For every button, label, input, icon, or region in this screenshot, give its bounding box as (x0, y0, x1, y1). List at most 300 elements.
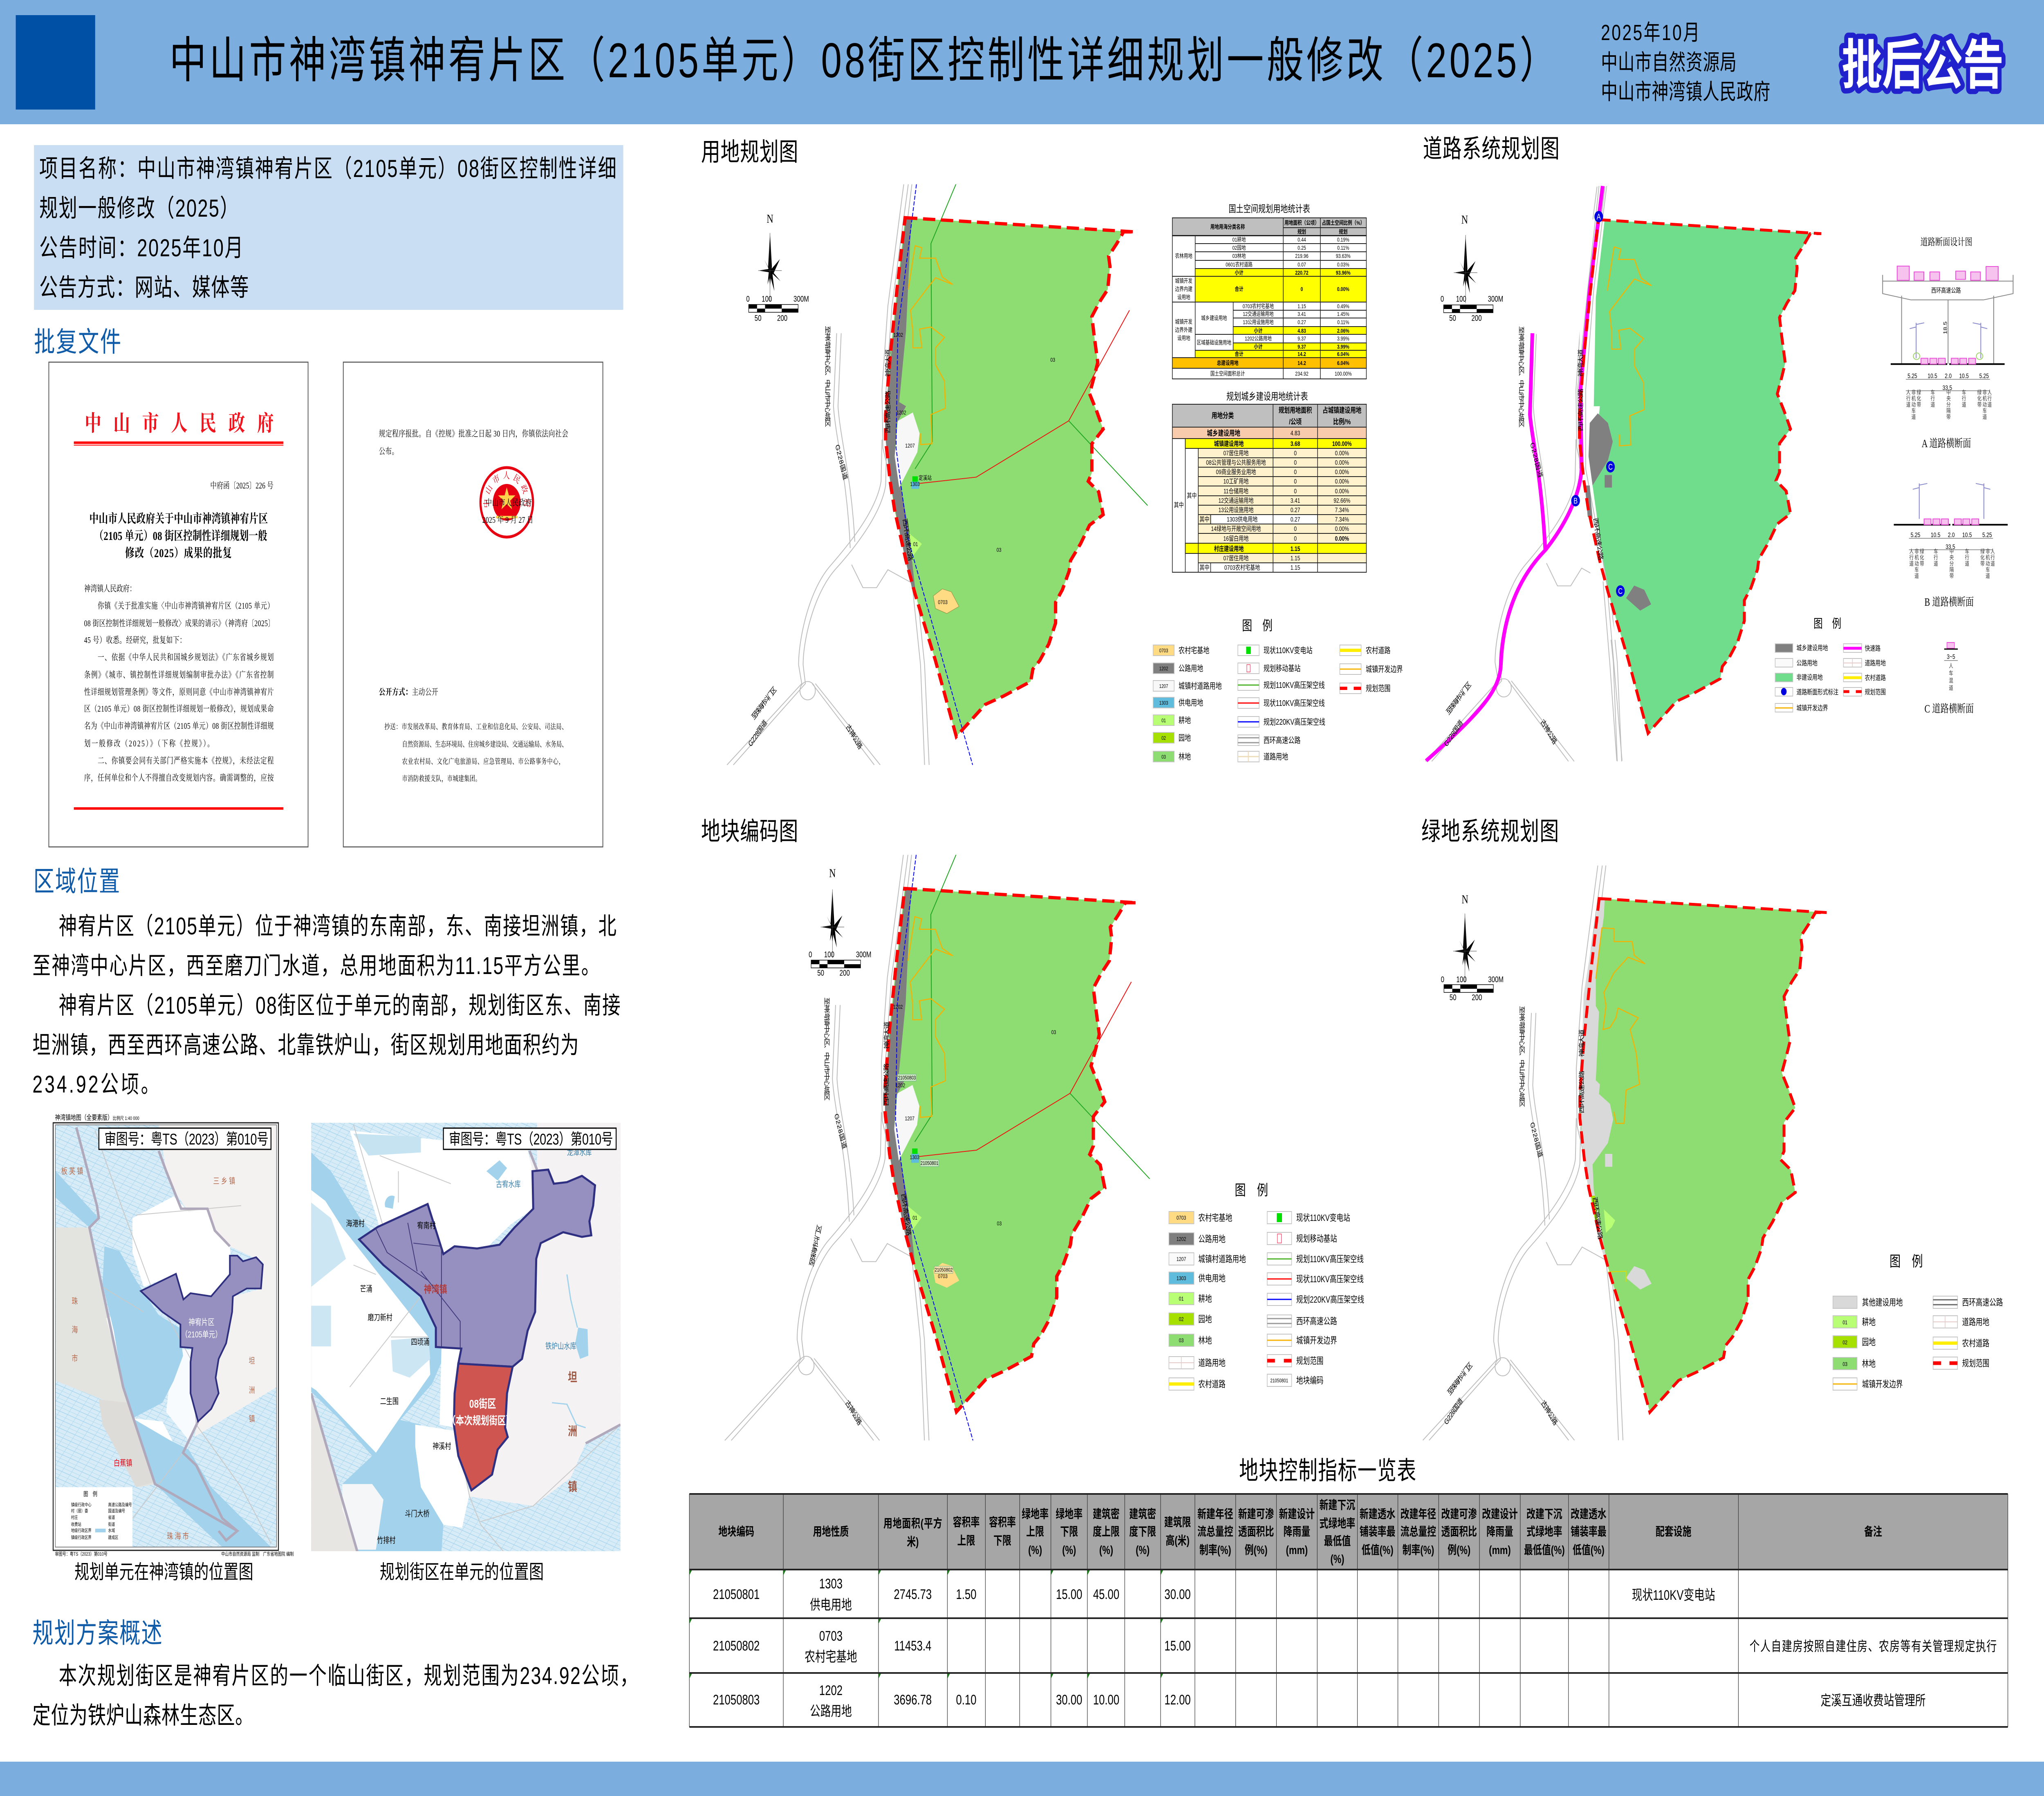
red government letterhead: 中山市人民政府 (85, 412, 274, 436)
caption: unit location: 规划单元在神湾镇的位置图 (74, 1561, 253, 1583)
section markers: C (1618, 587, 1623, 596)
urban-rural construction land table: 11仓储用地 (1224, 488, 1248, 495)
place names: 古宥水库 (496, 1180, 521, 1189)
legend: land use plan: 耕地 (1179, 716, 1191, 725)
land use statistics table (1172, 204, 1366, 379)
map legend: 高速公路及编号 (108, 1502, 132, 1507)
table row 21050803: 0.10 (956, 1693, 977, 1708)
map: block location within unit: 坦 (568, 1371, 577, 1384)
table row 21050801: 30.00 (1164, 1587, 1191, 1602)
approval body text: 条例》《城市、镇控制性详细规划编制审批办法》《广东省控制 (84, 670, 274, 680)
urban-rural construction land table: 7.34% (1335, 506, 1349, 514)
table header cells: 低值(%) (1573, 1543, 1605, 1557)
plot codes: 01 (912, 1215, 917, 1221)
urban-rural construction land table: 07居住用地 (1224, 450, 1248, 457)
section C (1925, 643, 1974, 715)
compass and scale: 200 (840, 968, 850, 978)
urban-rural construction land table: 其中 (1174, 502, 1184, 509)
legend: green space: 西环高速公路 (1962, 1298, 2003, 1308)
land use statistics table: 0.00% (1337, 286, 1349, 292)
table header cells: 新建年径 (1197, 1507, 1233, 1521)
legend: land use plan: 城镇开发边界 (1366, 665, 1403, 674)
land use statistics table: 0.07 (1298, 262, 1306, 268)
land use statistics table: 边界内建 (1175, 286, 1192, 292)
section B: 人行道 (1909, 549, 1914, 567)
land use statistics table: 3.99% (1337, 336, 1349, 342)
section A: 非机动车道 (1912, 390, 1916, 420)
table header cells: 改建可渗 (1441, 1507, 1477, 1521)
approval body text (84, 584, 274, 783)
land use statistics table: 规划 (1339, 228, 1347, 235)
table row 21050801: 1303 (819, 1577, 843, 1592)
land use statistics table: 6.04% (1337, 360, 1349, 366)
compass and scale: 200 (1472, 993, 1482, 1002)
legend: plot codes: 1202 (1177, 1236, 1186, 1242)
compass and scale: 300M (856, 950, 872, 959)
table row 21050802: 11453.4 (894, 1639, 931, 1654)
legend: plot codes: 林地 (1198, 1336, 1212, 1346)
urban-rural construction land table: 4.83 (1291, 430, 1300, 437)
logo block (16, 15, 95, 110)
land use statistics table: 01耕地 (1233, 236, 1246, 243)
urban-rural construction land table: 0 (1294, 478, 1297, 486)
urban-rural construction land table: 1303供电用地 (1227, 516, 1257, 524)
compass and scale: 0 (809, 950, 812, 959)
section B: 车行道 (1965, 548, 1969, 567)
legend: plot codes: 城镇开发边界 (1296, 1336, 1337, 1346)
section A: 绿化带 (1977, 389, 1982, 408)
place names: 海港村 (346, 1219, 365, 1228)
land use plan map: 1303 (910, 481, 920, 487)
place names: 二生围 (380, 1397, 399, 1406)
plot code plan map: 21050801 (921, 1161, 938, 1166)
map labels: G228国道 (833, 1113, 848, 1150)
plot codes (893, 1004, 1056, 1279)
map labels: 至珠海市斗门区 (1445, 680, 1472, 717)
urban-rural construction land table (1172, 391, 1366, 572)
legend: plot codes: 农村道路 (1198, 1379, 1226, 1390)
map: unit location within town: 审图号：粤TS（2023）第010号 (55, 1551, 108, 1557)
regional location paragraph: 坦洲镇，西至西环高速公路、北靠铁炉山，街区规划用地面积约为 (32, 1032, 579, 1059)
legend: land use plan: 园地 (1179, 733, 1191, 743)
map legend: 镇级行政区界 (71, 1534, 92, 1540)
legend: land use plan: 规划移动基站 (1264, 664, 1300, 673)
project info panel: 公告方式：网站、媒体等 (39, 274, 249, 302)
legend: land use plan: 01 (1161, 718, 1166, 723)
land use statistics table: 3.99% (1337, 344, 1349, 350)
land use plan map: 1202 (894, 332, 903, 338)
land use statistics table: 1202公路用地 (1245, 335, 1272, 342)
urban-rural construction land table: 0.00% (1335, 468, 1349, 476)
map heading: green space: 绿地系统规划图 (1421, 817, 1559, 846)
land use statistics table: 0.19% (1337, 237, 1349, 243)
urban-rural construction land table: 0.00% (1335, 478, 1349, 486)
legend: road system: 城乡建设用地 (1797, 644, 1828, 652)
legend: land use plan: 农村道路 (1366, 646, 1391, 655)
section B: 非机动车道 (1986, 549, 1990, 579)
map labels: 至珠海市斗门区 (808, 1224, 823, 1268)
section A: A 道路横断面 (1922, 437, 1971, 450)
approval document page 2: 公布。 (379, 447, 398, 457)
land use statistics table: 区域基础设施用地 (1197, 339, 1231, 346)
map labels: G228国道 (1443, 718, 1464, 748)
table row 21050802: 21050802 (713, 1639, 760, 1654)
urban-rural construction land table: 0.00% (1335, 525, 1349, 533)
land use statistics table: 0.27 (1298, 319, 1306, 325)
legend: land use plan: 图 例 (1242, 618, 1273, 634)
place names: 磨刀新村 (368, 1313, 392, 1322)
header band (0, 0, 2044, 124)
legend: plot codes: 西环高速公路 (1296, 1317, 1337, 1327)
land use statistics table: 0703农村宅基地 (1243, 302, 1274, 309)
section B: 人行道 (1990, 549, 1995, 567)
legend: road system: 城镇开发边界 (1797, 704, 1828, 712)
place names: 神溪村 (433, 1442, 451, 1451)
place names: 铁炉山水库 (545, 1341, 576, 1351)
regional location paragraph (32, 913, 621, 1098)
section A: 绿化带 (1917, 389, 1921, 408)
map legend (71, 1490, 132, 1540)
map legend: 省道 (108, 1514, 115, 1520)
legend: plot codes: 农村宅基地 (1198, 1213, 1232, 1223)
approved notice badge: 批后公告 (1842, 35, 2004, 95)
map labels: G228国道 (1529, 441, 1544, 479)
regional location paragraph: 神宥片区（2105单元）08街区位于单元的南部，规划街区东、南接 (59, 992, 621, 1019)
table header cells: 备注 (1864, 1525, 1882, 1538)
land use statistics table: 9.37 (1298, 336, 1306, 342)
approval body text: 序，任何单位和个人不得擅自改变规划内容。确需调整的，应按 (84, 773, 274, 783)
road system plan map (1425, 186, 1821, 761)
urban-rural construction land table: 7.34% (1335, 516, 1349, 524)
place names: 斗门大桥 (405, 1509, 430, 1518)
legend: plot codes: 园地 (1198, 1315, 1212, 1325)
legend: road system: 图 例 (1813, 617, 1841, 631)
land use statistics table: 12交通运输用地 (1243, 310, 1273, 317)
urban-rural construction land table: 占城镇建设用地 (1322, 406, 1361, 415)
compass and scale (1441, 213, 1503, 323)
table header cells: 铺装率最 (1360, 1525, 1396, 1538)
urban-rural construction land table: 08公共管理与公共服务用地 (1206, 459, 1266, 467)
legend: plot codes: 道路用地 (1198, 1358, 1226, 1368)
project info panel (34, 145, 623, 310)
table row 21050803: 21050803 (713, 1693, 760, 1708)
table header cells: 新建透水 (1360, 1507, 1396, 1521)
section B: 车行道 (1934, 548, 1938, 567)
table header cells: 例(%) (1245, 1543, 1268, 1557)
compass and scale: 0 (1441, 975, 1444, 984)
land use statistics table: 4.83 (1298, 328, 1306, 334)
section A: 5.25 (1979, 372, 1989, 380)
urban-rural construction land table: 比例/% (1333, 418, 1351, 426)
section markers: C (1608, 462, 1613, 472)
table header cells: 改建下沉 (1526, 1507, 1562, 1521)
land use statistics table: 农林用地 (1175, 253, 1192, 259)
land use statistics table: 城乡建设用地 (1201, 314, 1227, 321)
section B: 33.5 (1945, 543, 1955, 551)
compass and scale: 300M (793, 294, 809, 304)
table row 21050801: 21050801 (713, 1587, 760, 1602)
section B: B 道路横断面 (1925, 596, 1974, 609)
unit label: 神宥片区 (188, 1317, 215, 1327)
table row 21050801: 15.00 (1056, 1587, 1082, 1602)
highway corridor (1580, 219, 1616, 640)
table row 21050802: 15.00 (1164, 1639, 1191, 1654)
land use statistics table: 国土空间规划用地统计表 (1228, 204, 1310, 215)
map labels: 西环高速公路 (1578, 1070, 1585, 1113)
main title: 中山市神湾镇神宥片区（2105单元）08街区控制性详细规划一般修改（2025） (169, 33, 1557, 88)
block label: 08街区 (469, 1397, 496, 1411)
legend: road system (1775, 617, 1886, 712)
map review number: 审图号：粤TS（2023）第010号 (104, 1131, 269, 1148)
legend: land use plan: 城镇村道路用地 (1179, 681, 1222, 691)
legend: plot codes: 现状110KV高压架空线 (1296, 1274, 1364, 1285)
land use statistics table: 1.15 (1298, 303, 1306, 309)
approval body text: 性详细规划管理条例》等文件，原则同意《中山市神湾镇神宥片 (84, 687, 274, 697)
section B: 非机动车道 (1914, 549, 1919, 579)
approval document page 2: 自然资源局、生态环境局、住房城乡建设局、交通运输局、水务局、 (402, 740, 567, 749)
legend: land use plan: 供电用地 (1179, 698, 1204, 708)
legend: land use plan: 0703 (1159, 648, 1168, 654)
heading: approval documents: 批复文件 (34, 326, 121, 358)
land use statistics table: 219.96 (1295, 253, 1309, 259)
legend: plot codes: 耕地 (1198, 1294, 1212, 1304)
table header cells: 透面积比 (1238, 1525, 1274, 1538)
section A: 车行道 (1931, 389, 1935, 408)
plot codes: 0703 (938, 1273, 948, 1279)
land use statistics table: 总建设用地 (1217, 359, 1239, 366)
built-up land (1589, 413, 1613, 486)
approval title: 中山市人民政府关于中山市神湾镇神宥片区 (89, 512, 268, 526)
section B: 5.25 (1911, 531, 1920, 539)
land use statistics table: 边界外建 (1175, 327, 1192, 333)
compass and scale: N (829, 866, 836, 880)
legend: green space: 农村道路 (1962, 1339, 1989, 1349)
land use statistics table: 用地用海分类名称 (1210, 223, 1245, 230)
legend: plot codes: 0703 (1177, 1215, 1186, 1221)
plot code plan map (725, 855, 1150, 1440)
legend: land use plan: 规划220KV高压架空线 (1264, 717, 1325, 727)
approval body text: 划一般修改（2025）》（下称《控规》）。 (84, 739, 214, 749)
plan overview paragraph: 定位为铁炉山森林生态区。 (32, 1702, 253, 1729)
urban-rural construction land table: /公顷 (1289, 418, 1302, 426)
issue date and authorities (1601, 21, 1770, 104)
place names: 珠 (72, 1297, 78, 1306)
place names (61, 1167, 255, 1541)
issue date and authorities: 2025年10月 (1601, 21, 1700, 45)
table header cells: (%) (1330, 1553, 1344, 1566)
section A: 中央分隔带 (1946, 389, 1951, 420)
table header cells: 新建可渗 (1238, 1507, 1274, 1521)
table header cells: 上限 (957, 1534, 975, 1547)
table row 21050803: 1202 (819, 1683, 843, 1698)
legend: land use plan: 林地 (1179, 752, 1191, 761)
table header cells: 下限 (993, 1534, 1011, 1547)
map labels: 古神公路 (844, 1399, 863, 1427)
table row 21050802: 个人自建房按照自建住房、农房等有关管理规定执行 (1750, 1639, 1997, 1654)
footer band (0, 1762, 2044, 1796)
urban-rural construction land table: 100.00% (1332, 440, 1352, 448)
table row 21050802 (713, 1629, 1997, 1665)
place names: 市 (72, 1354, 78, 1363)
approval document page 1: 中府函〔2025〕226 号 (210, 481, 273, 491)
legend: land use plan: 03 (1161, 755, 1166, 760)
highway land (885, 218, 915, 592)
urban-rural construction land table: 0.00% (1335, 488, 1349, 495)
table header cells: 式绿地率 (1320, 1517, 1355, 1530)
table header cells: 绿地率 (1056, 1507, 1083, 1521)
table header cells: (mm) (1286, 1544, 1308, 1557)
table header cells: 最低值(%) (1524, 1543, 1565, 1557)
approval document page 2: 农业农村局、文化广电旅游局、应急管理局、市公路事务中心， (402, 757, 564, 766)
legend: road system: 快速路 (1865, 645, 1880, 653)
approval title: （2105 单元）08 街区控制性详细规划一般 (94, 529, 267, 543)
table header cells: (%) (1028, 1544, 1042, 1557)
map: unit location within town: 神湾镇地图（全要素版）比例尺 1:40 000 (55, 1113, 139, 1122)
compass and scale: N (1461, 213, 1468, 226)
heading: plot control index table: 地块控制指标一览表 (1239, 1456, 1416, 1485)
compass and scale: 300M (1488, 294, 1503, 304)
table header cells: 用地性质 (813, 1525, 849, 1538)
compass and scale: 50 (1450, 993, 1457, 1002)
plot code plan map: 21050802 (935, 1268, 953, 1273)
legend: land use plan: 现状110KV高压架空线 (1264, 699, 1325, 708)
urban-rural construction land table: 12交通运输用地 (1218, 497, 1253, 505)
map labels (747, 326, 914, 751)
land use statistics table: 0.25 (1298, 245, 1306, 251)
road cross sections: 道路断面设计图 (1921, 237, 1972, 248)
map labels: 西环高速公路 (1591, 1196, 1604, 1240)
section A: 人行道 (1906, 390, 1910, 408)
urban-rural construction land table: 村庄建设用地 (1214, 545, 1244, 553)
plot code plan map: 21050803 (898, 1075, 916, 1081)
table header cells: (%) (1136, 1544, 1150, 1557)
table header cells: 绿地率 (1022, 1507, 1049, 1521)
land use statistics table: 规划 (1298, 228, 1306, 235)
section A: 非机动车道 (1983, 390, 1987, 420)
urban-rural construction land table: 0.27 (1291, 506, 1300, 514)
table header cells: 下限 (1060, 1525, 1078, 1538)
legend: plot codes: 1207 (1177, 1256, 1186, 1262)
plot codes: 03 (997, 1220, 1002, 1227)
legend: land use plan: 道路用地 (1264, 752, 1288, 761)
table header cells: 配套设施 (1656, 1525, 1692, 1538)
place names: 白蕉镇 (114, 1458, 132, 1468)
urban-rural construction land table: 城乡建设用地 (1207, 429, 1240, 438)
approval body text: 区（2105 单元）08 街区控制性详细规划一般修改》，规划成果命 (84, 704, 274, 714)
table row 21050803: 定溪互通收费站管理所 (1821, 1693, 1925, 1709)
land use statistics table: 220.72 (1295, 270, 1309, 276)
table header cells: 建筑密 (1129, 1507, 1156, 1521)
table header cells: 新建设计 (1279, 1507, 1315, 1521)
legend: plot codes: 公路用地 (1198, 1234, 1226, 1245)
legend: land use plan: 现状110KV变电站 (1264, 646, 1313, 655)
urban-rural construction land table: 0.27 (1291, 516, 1300, 524)
land use plan map: 01 (913, 541, 918, 547)
section markers: B (1573, 496, 1578, 506)
legend: land use plan (1153, 618, 1403, 762)
section B: 中央分隔带 (1950, 548, 1954, 579)
legend: plot codes: 供电用地 (1198, 1274, 1226, 1284)
map legend: 地级行政区界 (71, 1527, 92, 1533)
project info panel: 公告时间：2025年10月 (39, 235, 243, 262)
project info panel: 规划一般修改（2025） (39, 195, 239, 222)
approval body text: 你镇《关于批准实施〈中山市神湾镇神宥片区（2105 单元） (98, 601, 274, 611)
legend: plot codes: 1303 (1177, 1275, 1186, 1281)
project info panel: 项目名称：中山市神湾镇神宥片区（2105单元）08街区控制性详细 (39, 155, 616, 183)
section B: 10.5 (1931, 531, 1941, 539)
urban-rural construction land table: 10工矿用地 (1224, 478, 1248, 486)
land use statistics table: 0601农村道路 (1226, 261, 1253, 268)
map review number: 审图号：粤TS（2023）第010号 (449, 1131, 613, 1148)
plot codes: 03 (1051, 1029, 1056, 1035)
section A: 33.5 (1943, 384, 1952, 392)
table header cells: (mm) (1489, 1544, 1511, 1557)
legend: road system: 非建设用地 (1797, 674, 1823, 682)
map: block location within unit: 镇 (568, 1480, 577, 1494)
land use statistics table: 1.45% (1337, 311, 1349, 317)
map legend: 收费站 (71, 1521, 81, 1527)
land use statistics table: 用地面积（公顷） (1284, 219, 1319, 226)
compass and scale: 50 (755, 314, 762, 323)
legend: green space: 耕地 (1862, 1317, 1876, 1328)
section C: 3~5 (1947, 653, 1955, 661)
urban-rural construction land table: 0703农村宅基地 (1224, 564, 1260, 572)
section B: 2.0 (1948, 531, 1955, 539)
urban-rural construction land table: 1.15 (1291, 564, 1300, 572)
map labels: G228国道 (747, 718, 769, 748)
place names: 龙潭水库 (567, 1148, 592, 1157)
legend: plot codes: 规划110KV高压架空线 (1296, 1254, 1364, 1265)
land use statistics table: 城镇开发 (1175, 277, 1192, 284)
plan overview paragraph (32, 1663, 638, 1729)
issue date and authorities: 中山市自然资源局 (1601, 51, 1737, 75)
legend: land use plan: 1207 (1159, 684, 1168, 689)
compass and scale: 200 (777, 314, 787, 323)
land use statistics table: 设用地 (1177, 334, 1190, 341)
approval document page 2 (343, 362, 603, 847)
section B: 绿化带 (1980, 548, 1985, 567)
map labels: 西环高速公路 (901, 518, 914, 562)
urban-rural construction land table: 07居住用地 (1224, 555, 1248, 562)
table header cells: 容积率 (953, 1515, 979, 1529)
section A: 18.5 (1943, 321, 1948, 334)
compass and scale: 100 (762, 294, 772, 304)
map labels (1443, 1006, 1604, 1427)
section B: 5.25 (1982, 531, 1992, 539)
plot control index table (689, 1494, 2008, 1727)
land use statistics table: 6.04% (1337, 351, 1349, 357)
map labels: 神湾大道 (883, 1021, 890, 1049)
legend: land use plan: 农村宅基地 (1179, 646, 1210, 655)
table header cells: 容积率 (989, 1515, 1016, 1529)
legend: green space: 其他建设用地 (1862, 1298, 1903, 1308)
map legend: 图 例 (83, 1490, 97, 1497)
map labels: 西环高速公路 (885, 390, 891, 433)
place names: 洲 (249, 1386, 255, 1395)
plot codes: 1303 (910, 1154, 919, 1160)
land use statistics table: 小计 (1254, 327, 1262, 334)
urban-rural construction land table: 0 (1294, 488, 1297, 495)
table row 21050801: 45.00 (1093, 1587, 1119, 1602)
section C: 人车混道 (1949, 663, 1953, 691)
map legend: 国道及编号 (108, 1508, 125, 1514)
place names: 珠 海 市 (167, 1532, 189, 1541)
map labels: G228国道 (1443, 1396, 1464, 1426)
map labels: 古神公路 (845, 723, 863, 751)
map labels: 至神湾镇中心区、中山市中心城区 (824, 326, 831, 427)
map labels: 至神湾镇中心区、中山市中心城区 (823, 997, 830, 1101)
legend: plot codes: 规划移动基站 (1296, 1234, 1337, 1244)
